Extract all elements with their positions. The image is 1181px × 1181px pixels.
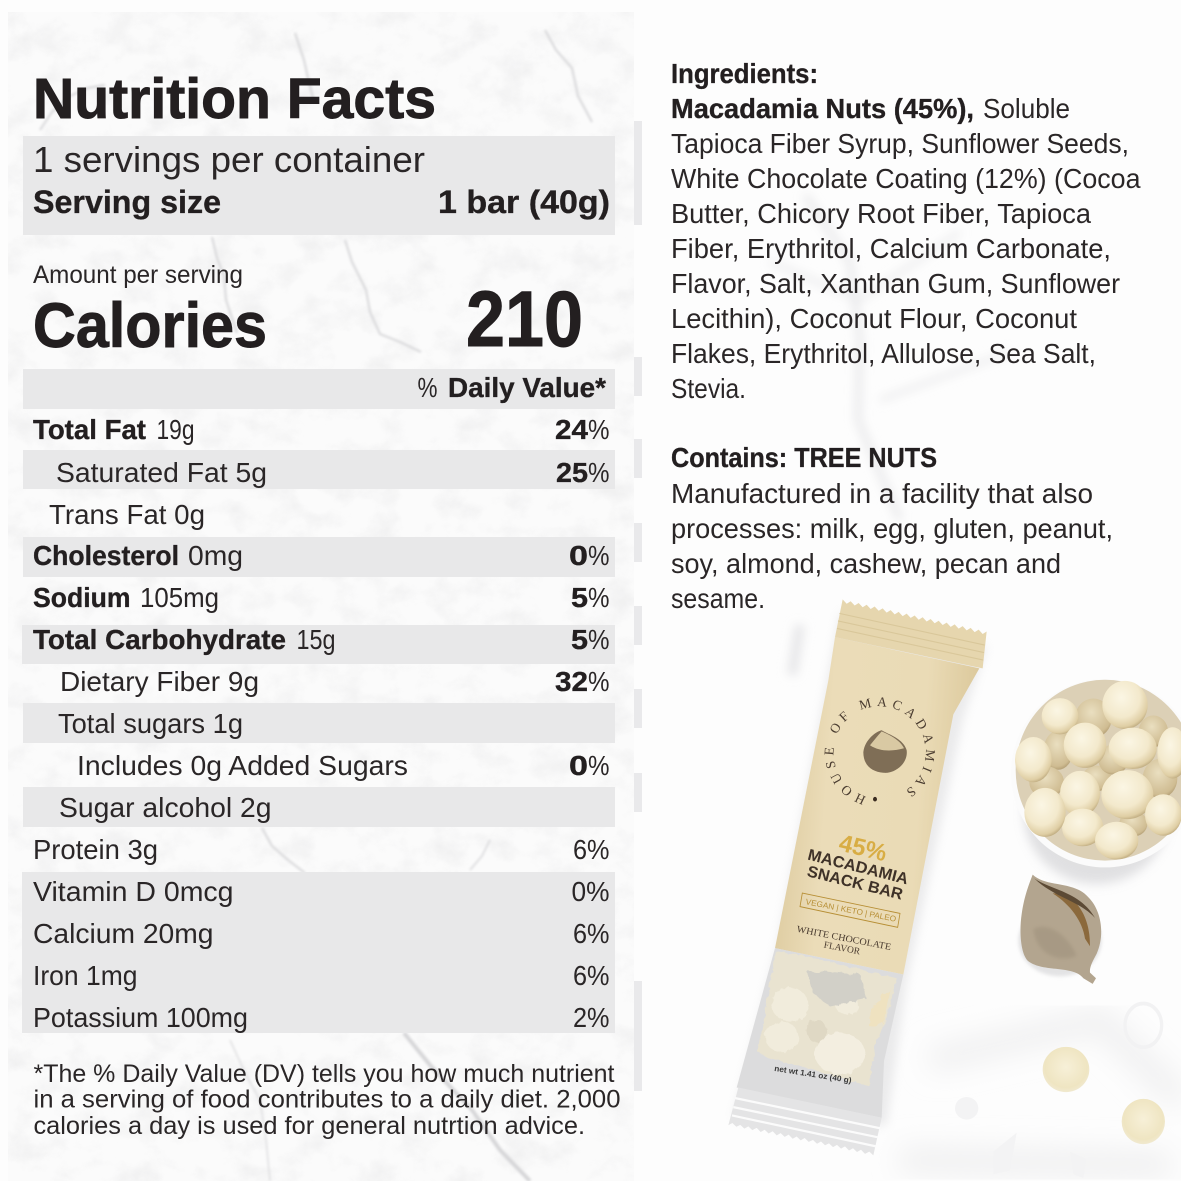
title: Nutrition Facts <box>33 67 436 131</box>
grey row bands <box>22 136 615 1033</box>
row: sodium: Sodium <box>33 582 130 613</box>
ingredients list: Fiber, Erythritol, Calcium Carbonate, <box>671 233 1111 264</box>
row: total carbohydrate: % <box>588 624 610 655</box>
label: snack bar: SNACK BAR <box>805 863 905 904</box>
row: total fat: Total Fat <box>33 414 146 445</box>
row: sodium: % <box>588 582 610 613</box>
ingredients list: Lecithin), Coconut Flour, Coconut <box>671 303 1077 334</box>
top seal <box>835 599 987 668</box>
side tabs <box>634 121 642 1091</box>
row: added sugars: 0 <box>569 750 588 781</box>
calories: 210 <box>466 274 583 363</box>
product: snack bar package <box>728 600 1181 1155</box>
row: potassium <box>33 1002 610 1033</box>
foil body <box>775 637 979 974</box>
package shadow <box>733 613 987 1125</box>
footnote: calories a day is used for general nutrtion advice. <box>34 1112 585 1140</box>
ingredients list: Stevia. <box>671 373 746 404</box>
amount per serving: Amount per serving <box>33 261 243 289</box>
row: added sugars <box>77 750 610 781</box>
row: dietary fiber: % <box>588 666 610 697</box>
row: total fat: 24 <box>555 414 588 445</box>
row: sugar alcohol: Sugar alcohol 2g <box>59 792 272 823</box>
label: flavour: FLAVOR <box>823 941 861 958</box>
row: cholesterol <box>33 540 610 571</box>
row: total carbohydrate: 5 <box>571 624 588 655</box>
white chips <box>955 1003 1162 1178</box>
serving size: 1 bar (40g) <box>438 184 610 220</box>
bowl <box>1011 679 1181 867</box>
loose nut <box>1043 1047 1089 1092</box>
row: vitamin d: 0% <box>572 876 610 907</box>
row: protein: 6% <box>573 834 610 865</box>
bowl shadow <box>1023 741 1170 884</box>
row: dietary fiber: 32 <box>555 666 588 697</box>
row: vitamin d <box>33 876 610 907</box>
row: total carbohydrate: 15g <box>296 624 336 655</box>
row: trans fat: Trans Fat 0g <box>49 499 205 530</box>
row: cholesterol: 0 <box>569 540 588 571</box>
marble texture <box>8 12 634 1181</box>
row: total fat: % <box>588 414 610 445</box>
row: dietary fiber <box>60 666 610 697</box>
row: total fat <box>33 414 610 445</box>
loose nut <box>1122 1099 1165 1144</box>
clear window <box>737 948 903 1118</box>
label: vegan keto paleo: VEGAN | KETO | PALEO <box>805 897 897 924</box>
bottom seal <box>728 1088 882 1155</box>
ingredients list: Butter, Chicory Root Fiber, Tapioca <box>671 198 1091 229</box>
row: calcium: Calcium 20mg <box>33 918 214 949</box>
row: saturated fat: % <box>588 457 610 488</box>
panel: nutrition facts <box>8 12 642 1181</box>
ingredients list: Macadamia Nuts (45%), <box>671 93 974 124</box>
ingredients text block <box>671 58 1141 614</box>
label: macadamia: MACADAMIA <box>806 847 910 888</box>
bowl of nuts <box>1015 681 1181 860</box>
footnote: in a serving of food contributes to a daily diet. 2,000 <box>34 1086 620 1114</box>
label: flavour: WHITE CHOCOLATE <box>796 925 892 953</box>
label box <box>800 893 900 927</box>
footnote: *The % Daily Value (DV) tells you how much nutrient <box>34 1060 615 1088</box>
allergen heading: Contains: TREE NUTS <box>671 442 937 473</box>
row: sodium: 105mg <box>140 582 219 613</box>
ingredients list: Flavor, Salt, Xanthan Gum, Sunflower <box>671 268 1120 299</box>
row: calcium: 6% <box>573 918 610 949</box>
row: protein <box>33 834 610 865</box>
ingredients list: Flakes, Erythritol, Allulose, Sea Salt, <box>671 338 1096 369</box>
row: saturated fat <box>56 457 610 488</box>
row: cholesterol: % <box>588 540 610 571</box>
row: sodium: 5 <box>571 582 588 613</box>
row: protein: Protein 3g <box>33 834 158 865</box>
marble veins <box>40 30 592 1181</box>
panel background <box>8 12 634 1181</box>
allergen statement: Manufactured in a facility that also <box>671 478 1093 509</box>
ingredients heading: Ingredients: <box>671 58 818 89</box>
row: sodium <box>33 582 610 613</box>
calories <box>33 274 583 363</box>
row: added sugars: Includes 0g Added Sugars <box>77 750 408 781</box>
allergen statement: processes: milk, egg, gluten, peanut, <box>671 513 1113 544</box>
row: total sugars: Total sugars 1g <box>58 708 243 739</box>
row: calcium <box>33 918 610 949</box>
bar chunks <box>765 971 890 1074</box>
row: cholesterol: 0mg <box>188 540 243 571</box>
row: potassium: Potassium 100mg <box>33 1002 248 1033</box>
row: total carbohydrate <box>33 624 610 655</box>
ingredients list: Tapioca Fiber Syrup, Sunflower Seeds, <box>671 128 1129 159</box>
row: vitamin d: Vitamin D 0mcg <box>33 876 234 907</box>
bar contents <box>757 951 897 1086</box>
allergen statement: soy, almond, cashew, pecan and <box>671 548 1061 579</box>
row: dietary fiber: Dietary Fiber 9g <box>60 666 259 697</box>
row: total carbohydrate: Total Carbohydrate <box>33 624 286 655</box>
top seal ridges <box>837 613 985 660</box>
label: net weight: net wt 1.41 oz (40 g) <box>774 1064 852 1085</box>
logo nut <box>863 730 907 773</box>
footnote <box>34 1060 620 1140</box>
allergen statement: sesame. <box>671 583 765 614</box>
servings per container: 1 servings per container <box>33 139 425 180</box>
daily value header: % <box>418 372 438 403</box>
row: iron: Iron 1mg <box>33 960 138 991</box>
serving size: Serving size <box>33 184 221 220</box>
row: iron: 6% <box>573 960 610 991</box>
whole macadamia in shell <box>1018 875 1102 984</box>
row: saturated fat: 25 <box>556 457 588 488</box>
logo dot <box>873 797 877 801</box>
ingredients list: Soluble <box>983 93 1070 124</box>
logo ring text: HOUSE OF MACADAMIAS <box>824 697 935 805</box>
row: cholesterol: Cholesterol <box>33 540 179 571</box>
ingredients list: White Chocolate Coating (12%) (Cocoa <box>671 163 1141 194</box>
allergen statement <box>671 478 1113 614</box>
calories: Calories <box>33 291 267 361</box>
row: iron <box>33 960 610 991</box>
package artwork <box>728 599 1181 1178</box>
row: potassium: 2% <box>573 1002 610 1033</box>
serving size <box>33 184 610 220</box>
daily value header: Daily Value* <box>448 372 606 403</box>
row: total fat: 19g <box>156 414 194 445</box>
ingredients list <box>671 93 1141 404</box>
row: added sugars: % <box>588 750 610 781</box>
label: 45%: 45% <box>836 830 889 867</box>
row: saturated fat: Saturated Fat 5g <box>56 457 267 488</box>
bottom seal ridges <box>732 1098 880 1146</box>
